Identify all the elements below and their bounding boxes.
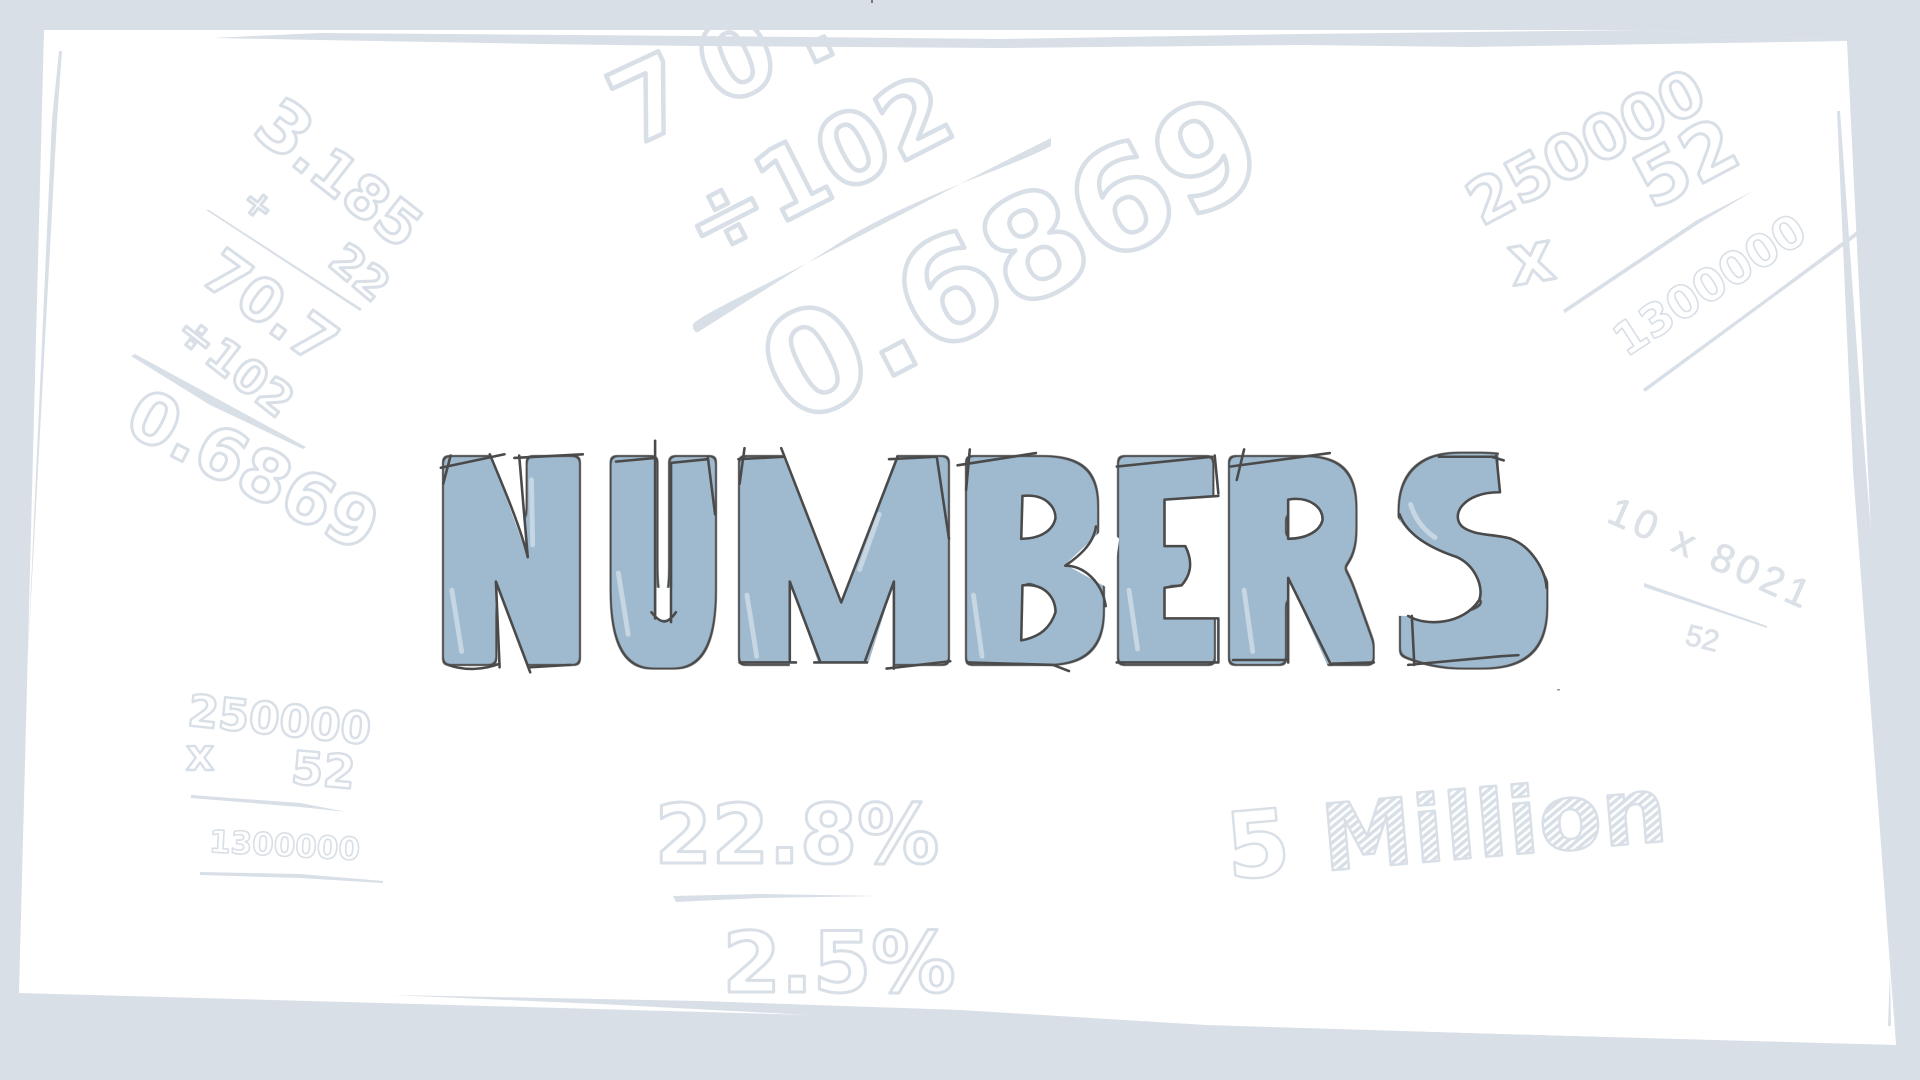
faint sums: top left column: + bbox=[234, 179, 283, 230]
faint sums: bottom centre percentages: 22.8% bbox=[655, 788, 939, 883]
faint sums: top left column: 22 bbox=[319, 234, 399, 312]
title letter fills: B bbox=[959, 416, 1107, 715]
title letter fills: U bbox=[609, 417, 717, 716]
faint sums: top right multiplication bbox=[1454, 54, 1857, 392]
title highlights bbox=[452, 480, 1435, 656]
faint sums: top left column: 0.6869 bbox=[114, 373, 392, 568]
faint sums: top left column bbox=[114, 82, 442, 568]
faint sums: top right multiplication: x bbox=[1501, 214, 1560, 303]
faint sums: top right multiplication: 52 bbox=[1619, 100, 1753, 226]
faint sums: bottom left multiplication bbox=[186, 686, 383, 883]
faint sums: top right multiplication: 250000 bbox=[1454, 54, 1717, 240]
faint sums: top left column: ÷102 bbox=[165, 303, 304, 428]
title: NUMBERS bbox=[438, 416, 1561, 716]
faint sums: top right multiplication: 1300000 bbox=[1603, 203, 1816, 367]
faint sums: bottom left multiplication: x bbox=[186, 730, 214, 781]
title letter fills bbox=[438, 416, 1552, 716]
faint sums: bottom left multiplication: 1300000 bbox=[208, 824, 361, 868]
faint sums: top centre division: ÷102 bbox=[663, 53, 971, 284]
faint sums: bottom left multiplication: 52 bbox=[289, 740, 358, 800]
faint sums: bottom centre percentages: 2.5% bbox=[723, 914, 955, 1012]
title letter fills: S bbox=[1394, 417, 1552, 715]
faint sums: right handwritten sum: 10 x 8021 bbox=[1602, 489, 1821, 619]
faint sums: top left column: 70.7 bbox=[189, 236, 350, 380]
faint sums: top centre division: 0.6869 bbox=[735, 62, 1289, 458]
title letter shaping: counters and notches bbox=[487, 441, 1561, 676]
title letter fills: E bbox=[1116, 418, 1215, 716]
faint sums: top centre division bbox=[604, 30, 1252, 414]
faint text: 5 Million: 5 Million bbox=[1221, 756, 1671, 901]
title letter fills: N bbox=[438, 416, 585, 715]
faint sums: right handwritten sum: 52 bbox=[1682, 619, 1722, 659]
faint sums: bottom centre percentages bbox=[660, 800, 954, 994]
faint sums: bottom left multiplication: 250000 bbox=[186, 686, 374, 756]
title letter fills: M bbox=[729, 416, 959, 715]
title sketch overshoot strokes bbox=[441, 441, 1547, 672]
faint sums: top left column: 3.185 bbox=[240, 82, 442, 264]
title letter fills: R bbox=[1223, 416, 1367, 715]
